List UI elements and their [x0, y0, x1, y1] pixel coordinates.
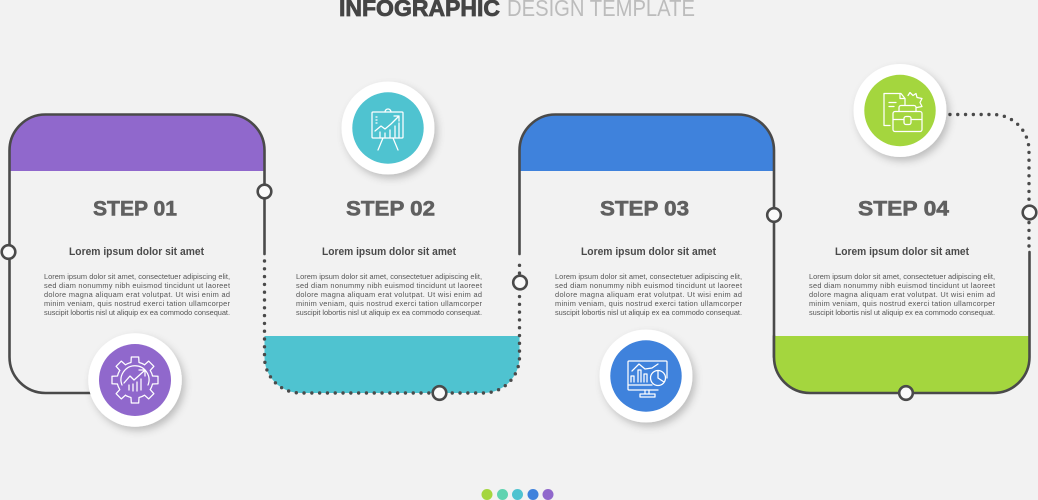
step heading: STEP 04 [858, 198, 949, 220]
icon badge: monitor dashboard [600, 330, 692, 422]
body text: minim veniam, quis nostrud exerci tation ullamcorper [296, 299, 483, 308]
pagination dots [482, 489, 554, 500]
purple header band [10, 114, 264, 171]
body text: minim veniam, quis nostrud exerci tation ullamcorper [555, 299, 743, 308]
step heading: STEP 02 [346, 198, 435, 220]
icon badge: gear with chart [88, 333, 182, 427]
body text [555, 272, 743, 317]
body text: sed diam nonummy nibh euismod tincidunt ut laoreet [555, 281, 742, 290]
title [339, 0, 695, 21]
body text: minim veniam, quis nostrud exerci tation ullamcorper [44, 299, 231, 308]
body text: Lorem ipsum dolor sit amet, consectetuer adipiscing elit, [809, 272, 995, 281]
step heading: STEP 03 [600, 198, 689, 220]
subheading: Lorem ipsum dolor sit amet [581, 246, 716, 258]
body text: dolore magna aliquam erat volutpat. Ut wisi enim ad [296, 290, 482, 299]
body text: Lorem ipsum dolor sit amet, consectetuer adipiscing elit, [296, 272, 482, 281]
body text [44, 272, 231, 317]
subheading: Lorem ipsum dolor sit amet [322, 246, 456, 258]
body text: dolore magna aliquam erat volutpat. Ut wisi enim ad [44, 290, 230, 299]
subheading: Lorem ipsum dolor sit amet [69, 246, 204, 258]
icon badge: presentation board [342, 82, 434, 174]
body text [809, 272, 996, 317]
body text: suscipit lobortis nisl ut aliquip ex ea commodo consequat. [44, 308, 230, 317]
body text: suscipit lobortis nisl ut aliquip ex ea commodo consequat. [296, 308, 482, 317]
panel: step 04 [774, 114, 1030, 393]
panel outline [10, 114, 264, 393]
body text: sed diam nonummy nibh euismod tincidunt ut laoreet [809, 281, 995, 290]
body text: dolore magna aliquam erat volutpat. Ut wisi enim ad [555, 290, 742, 299]
connector nodes [2, 185, 1036, 400]
subheading: Lorem ipsum dolor sit amet [835, 246, 969, 258]
body text: dolore magna aliquam erat volutpat. Ut wisi enim ad [809, 290, 995, 299]
icon badge: briefcase with document [854, 64, 946, 157]
body text: Lorem ipsum dolor sit amet, consectetuer adipiscing elit, [44, 272, 230, 281]
teal footer band [264, 336, 520, 393]
body text: sed diam nonummy nibh euismod tincidunt ut laoreet [296, 281, 482, 290]
panel: step 03 [520, 114, 774, 357]
body text: minim veniam, quis nostrud exerci tation ullamcorper [809, 299, 996, 308]
body text: sed diam nonummy nibh euismod tincidunt ut laoreet [44, 281, 230, 290]
blue header band [520, 114, 774, 171]
dotted connector [948, 114, 1029, 246]
body text [296, 272, 483, 317]
body text: suscipit lobortis nisl ut aliquip ex ea commodo consequat. [809, 308, 995, 317]
panel: step 01 [10, 114, 264, 393]
body text: Lorem ipsum dolor sit amet, consectetuer adipiscing elit, [555, 272, 742, 281]
panel: step 02 [264, 198, 520, 393]
dotted outline [264, 261, 520, 393]
green footer band [774, 336, 1030, 393]
panel outline [774, 252, 1030, 393]
body text: suscipit lobortis nisl ut aliquip ex ea commodo consequat. [555, 308, 742, 317]
panel outline [520, 114, 774, 357]
step heading: STEP 01 [93, 198, 177, 220]
